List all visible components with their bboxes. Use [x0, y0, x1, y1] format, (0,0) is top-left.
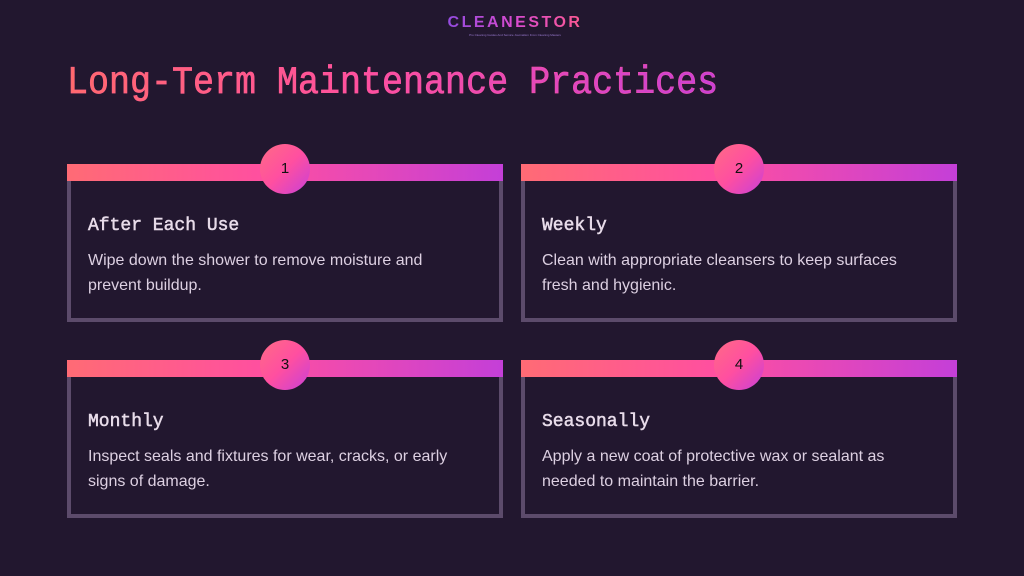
heading 2: Weekly	[542, 216, 607, 236]
card 4	[521, 340, 957, 518]
text 4: Apply a new coat of protective wax or sealant as needed to maintain the barrier.	[542, 448, 884, 490]
badge 2: 2	[735, 160, 743, 177]
title: Long-Term Maintenance Practices	[67, 61, 718, 105]
badge 4	[714, 340, 764, 390]
badge 3	[260, 340, 310, 390]
text 2: Clean with appropriate cleansers to keep surfaces fresh and hygienic.	[542, 252, 897, 294]
heading 4: Seasonally	[542, 412, 650, 432]
badge 1	[260, 144, 310, 194]
card 2	[521, 144, 957, 322]
text 1: Wipe down the shower to remove moisture and prevent buildup.	[88, 252, 422, 294]
text 3: Inspect seals and fixtures for wear, cracks, or early signs of damage.	[88, 448, 447, 490]
card 3	[67, 340, 503, 518]
logo: Pro Cleaning Guides And Service Journalism From Cleaning Masters	[469, 33, 561, 37]
badge 3: 3	[281, 356, 289, 373]
badge 4: 4	[735, 356, 743, 373]
heading 1: After Each Use	[88, 216, 239, 236]
badge 1: 1	[281, 160, 289, 177]
logo: CLEANESTOR	[448, 14, 582, 31]
card 1	[67, 144, 503, 322]
badge 2	[714, 144, 764, 194]
heading 3: Monthly	[88, 412, 164, 432]
